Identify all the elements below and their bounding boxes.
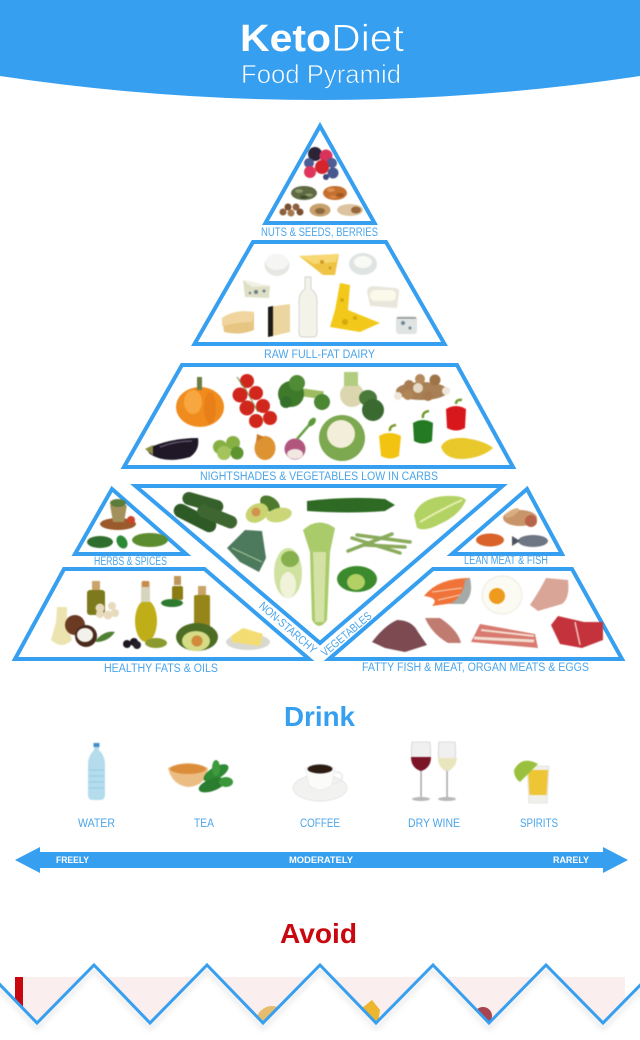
icon: milk bottle [299,277,317,337]
label: FATTY FISH & MEAT, ORGAN MEATS & EGGS [362,662,589,674]
panel: avoid, cut off by zigzag [0,965,640,1040]
icon: cauliflower [319,415,365,461]
icon: fish [512,535,548,547]
icon: brussels sprouts [213,436,244,460]
panel: herbs and spices [75,489,186,568]
label: NUTS & SEEDS, BERRIES [261,227,378,239]
icon: romaine lettuce [414,496,466,529]
icon: asparagus [348,534,410,553]
drink: tea: TEA [194,816,214,830]
icon: avocado [176,623,218,651]
icon: macadamia nuts [96,602,119,620]
icon: zucchini [307,498,395,512]
icon: tea and mint [168,760,233,795]
icon: pumpkin [176,377,224,427]
icon: eggplant [145,438,198,460]
icon: chips [362,1000,380,1022]
icon: seeds and almonds [291,186,347,200]
header banner [0,0,640,100]
icon: tomatoes [232,374,277,428]
icon: cheeses [222,253,417,337]
drink: dry wine: DRY WINE [408,816,460,830]
drink: spirits: SPIRITS [520,816,558,830]
panel: fatty fish, meat, organ meats and eggs [329,569,622,674]
label: NIGHTSHADES & VEGETABLES LOW IN CARBS [200,471,438,483]
drink: water: WATER [78,816,115,830]
label: HEALTHY FATS & OILS [104,663,218,675]
panel: non-starchy vegetables [136,486,502,643]
icon: heart [425,618,461,643]
label: non-starchy: NON-STARCHY [256,600,319,657]
icon: avocados [242,492,293,527]
panel: healthy fats and oils [15,569,309,675]
frequency arrow: MODERATELY [289,855,354,866]
icon: bread [256,1006,288,1038]
icon: broccoli [278,375,330,410]
panel: nuts, seeds and berries [261,126,378,239]
icon: coffee cup [293,764,347,801]
heading: avoid: Avoid [280,918,357,949]
icon: fresh herbs [87,533,168,551]
panel: lean meat and fish [452,489,562,567]
icon: yellow squash [441,438,493,459]
icon: turnip [284,416,318,460]
frequency arrow [15,847,628,873]
icon: butter [226,628,270,650]
icon: cucumbers [171,490,239,535]
drink: coffee: COFFEE [300,816,340,830]
icon: olives and basil [123,599,183,649]
label: LEAN MEAT & FISH [464,555,548,567]
icon: berries [304,147,338,180]
icon: wine glasses [411,742,457,801]
icon: kale [227,530,266,572]
icon: water bottle [88,743,105,800]
drink: tea [168,760,233,830]
icon: beef steak [551,616,603,648]
icon: coconut [65,615,115,647]
frequency arrow: FREELY [56,855,90,866]
icon: celery [303,522,335,626]
drink: spirits [514,761,558,830]
icon: pork chop [530,578,568,611]
icon: crab [476,534,504,546]
label: vegetables: VEGETABLES [319,610,375,659]
panel: nightshades and low-carb vegetables [124,365,513,483]
icon: nuts [280,204,363,216]
icon: napa cabbage [274,548,302,598]
icon: bell peppers [379,400,466,458]
title: KetoDiet [240,18,404,60]
subtitle: Food Pyramid [241,59,401,89]
frequency arrow: RARELY [553,855,590,866]
icon: lettuce [337,566,377,592]
icon: fried egg [482,576,522,614]
icon: shot glass with lime [514,761,549,803]
icon: onion [254,434,276,460]
icon: liver [372,620,427,652]
icon: mortar and spices [100,499,136,530]
icon: oil bottles [51,576,210,645]
label: RAW FULL-FAT DAIRY [264,349,375,361]
heading: drink: Drink [284,701,355,732]
icon: bacon [471,624,538,648]
drink: coffee [293,764,347,830]
drink: dry wine [408,742,460,830]
icon: cured meat [474,1007,492,1025]
panel: raw full-fat dairy [194,242,444,361]
icon: celeriac [340,372,384,421]
icon: mushrooms [394,374,450,401]
drink: water [78,743,115,830]
icon: salmon [424,578,471,606]
icon: chicken [503,506,537,527]
label: HERBS & SPICES [94,556,167,568]
zigzag mask [0,965,640,1040]
